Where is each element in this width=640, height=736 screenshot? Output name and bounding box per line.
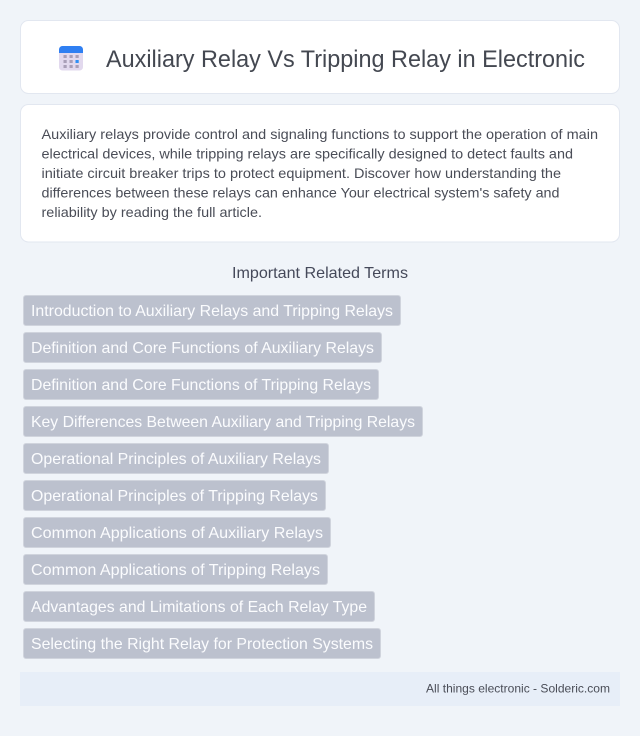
tag 10: Selecting the Right Relay for Protection Systems — [31, 636, 373, 653]
tag 8 — [24, 554, 328, 584]
footer — [20, 672, 620, 706]
tag 9: Advantages and Limitations of Each Relay Type — [31, 599, 367, 616]
tag 6: Operational Principles of Tripping Relays — [31, 488, 318, 505]
list: related term tags — [24, 296, 422, 658]
text block: summary: differences between these relays can enhance Your electrical system's safety and — [42, 184, 560, 200]
tag 5: Operational Principles of Auxiliary Relays — [31, 451, 321, 468]
tag 2: Definition and Core Functions of Auxiliary Relays — [31, 340, 374, 357]
text block: summary: electrical devices, while tripping relays are specifically designed to detect faults and — [42, 146, 573, 162]
heading: related terms: Important Related Terms — [232, 265, 408, 282]
tag 4 — [24, 406, 422, 436]
panel: summary — [20, 104, 620, 242]
icon: calendar — [59, 46, 83, 70]
panel: header — [20, 20, 620, 94]
tag 1 — [24, 296, 400, 326]
tag 1: Introduction to Auxiliary Relays and Tripping Relays — [31, 303, 393, 320]
tag 5 — [24, 444, 328, 474]
tag 3: Definition and Core Functions of Tripping Relays — [31, 377, 371, 394]
tag 10 — [24, 628, 380, 658]
tag 8: Common Applications of Tripping Relays — [31, 562, 320, 579]
tag 3 — [24, 370, 378, 400]
tag 2 — [24, 332, 382, 362]
title: Auxiliary Relay Vs Tripping Relay in Electronic — [106, 46, 585, 73]
tag 7: Common Applications of Auxiliary Relays — [31, 525, 323, 542]
text block: summary: initiate circuit breaker trips to protect equipment. Discover how understanding the — [42, 165, 561, 181]
text block: summary — [42, 126, 598, 220]
tag 4: Key Differences Between Auxiliary and Tripping Relays — [31, 414, 415, 431]
footer: All things electronic - Solderic.com — [426, 682, 610, 696]
text block: summary: reliability by reading the full article. — [42, 204, 262, 220]
tag 7 — [24, 518, 330, 548]
tag 9 — [24, 592, 374, 622]
text block: summary: Auxiliary relays provide control and signaling functions to support the operation of main — [42, 126, 598, 142]
tag 6 — [24, 480, 326, 510]
